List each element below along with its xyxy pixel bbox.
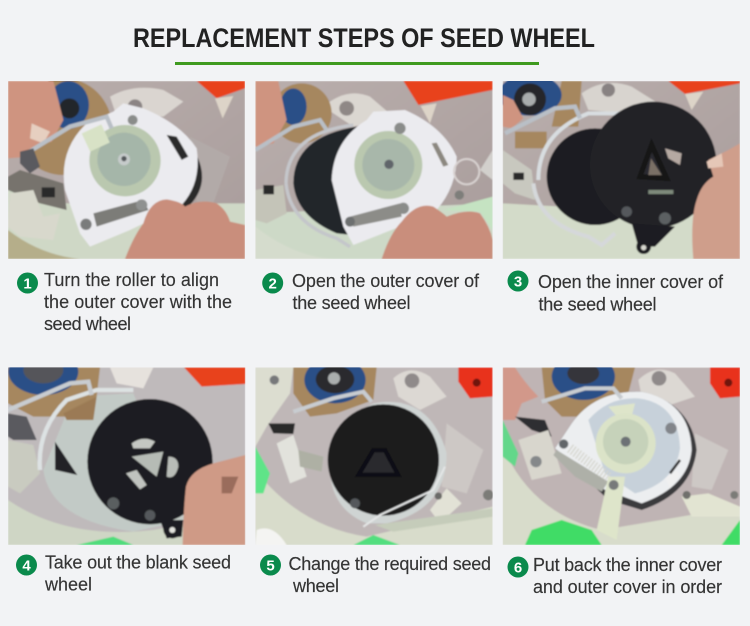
step 2 caption: Open the outer cover of — [292, 271, 480, 291]
step 1 badge — [17, 272, 38, 294]
panel: step 3 — [498, 74, 740, 315]
step 5 badge — [260, 554, 281, 576]
step 5 badge: 5 — [266, 558, 275, 574]
panel: step 5 — [255, 357, 494, 596]
photo: inner cover opened — [498, 74, 740, 259]
photo: outer cover aligned — [8, 78, 245, 259]
step 2 badge: 2 — [269, 276, 277, 292]
photo: covers put back — [503, 353, 740, 545]
panel: step 2 — [255, 81, 493, 313]
panel: step 1 — [8, 78, 245, 334]
photo: blank seed wheel removal — [8, 348, 245, 545]
step 3 badge — [508, 270, 528, 292]
step 1 caption: seed wheel — [44, 314, 131, 334]
step 4 caption: wheel — [44, 574, 92, 594]
panel: step 6 — [503, 353, 740, 597]
step 1 badge: 1 — [23, 276, 32, 292]
step 1 caption: Turn the roller to align — [44, 270, 219, 290]
step 2 badge — [262, 272, 283, 294]
step 2 caption: the seed wheel — [292, 293, 410, 313]
photo: outer cover opened — [255, 81, 493, 259]
step 6 badge: 6 — [514, 560, 522, 576]
title: REPLACEMENT STEPS OF SEED WHEEL — [133, 23, 595, 53]
step 5 caption: wheel — [292, 576, 339, 596]
panel: step 4 — [8, 348, 245, 594]
step 4 badge: 4 — [22, 558, 31, 574]
step 6 badge — [508, 556, 528, 578]
step 6 caption: Put back the inner cover — [533, 555, 722, 575]
photo: required seed wheel changed — [255, 357, 494, 545]
step 4 badge — [16, 554, 37, 576]
step 3 caption: the seed wheel — [538, 294, 656, 314]
step 3 badge: 3 — [514, 274, 522, 290]
step 4 caption: Take out the blank seed — [45, 552, 231, 572]
step 6 caption: and outer cover in order — [533, 577, 722, 597]
title underline — [175, 62, 539, 65]
step 3 caption: Open the inner cover of — [538, 272, 724, 292]
step 1 caption: the outer cover with the — [44, 292, 232, 312]
step 5 caption: Change the required seed — [288, 554, 491, 574]
